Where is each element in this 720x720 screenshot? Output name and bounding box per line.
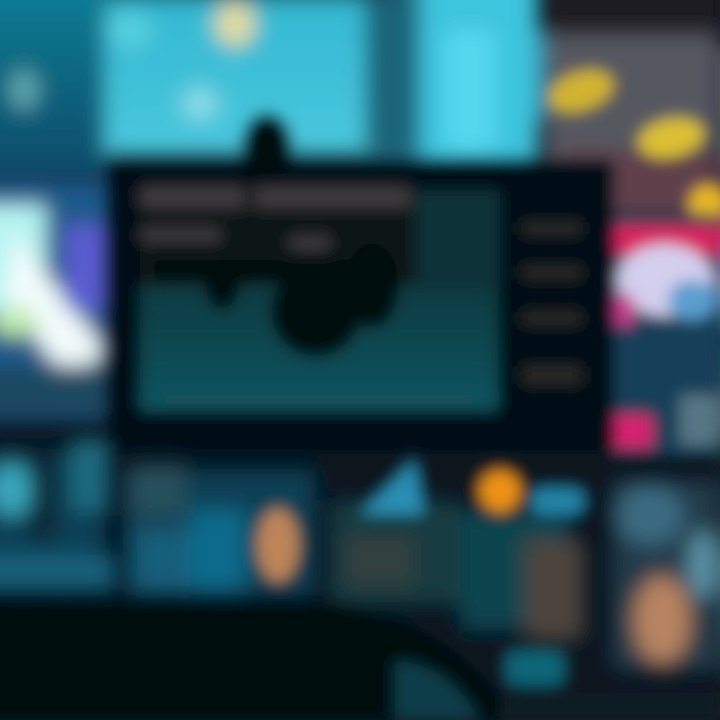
icon: orange dot xyxy=(478,469,522,513)
icon: yellow light 1 xyxy=(542,61,620,121)
panel: central monitor xyxy=(108,160,613,450)
icon: blue shape xyxy=(358,458,425,515)
panel: lower middle cards xyxy=(125,465,583,640)
icon: blue chip xyxy=(530,487,585,515)
person silhouette xyxy=(155,114,398,356)
icon: yellow light 3 xyxy=(688,184,720,224)
heading: blurred title text xyxy=(140,186,410,250)
panel: left bright display xyxy=(0,180,110,420)
panel: lower left teal block xyxy=(0,440,115,590)
foreground: dark desk curve xyxy=(0,600,720,720)
icon: yellow light 2 xyxy=(634,111,708,165)
panel: lower right with hand xyxy=(612,480,720,670)
background: top right wall with yellow lights xyxy=(545,0,720,220)
background: top wall panels xyxy=(0,0,575,180)
panel: right pink display xyxy=(610,215,720,455)
chart: teal inner screen xyxy=(140,285,498,410)
text block: right column blurred labels xyxy=(522,222,582,384)
panel: lower centre card xyxy=(330,500,460,605)
icon: skin-tone hand xyxy=(256,507,300,583)
